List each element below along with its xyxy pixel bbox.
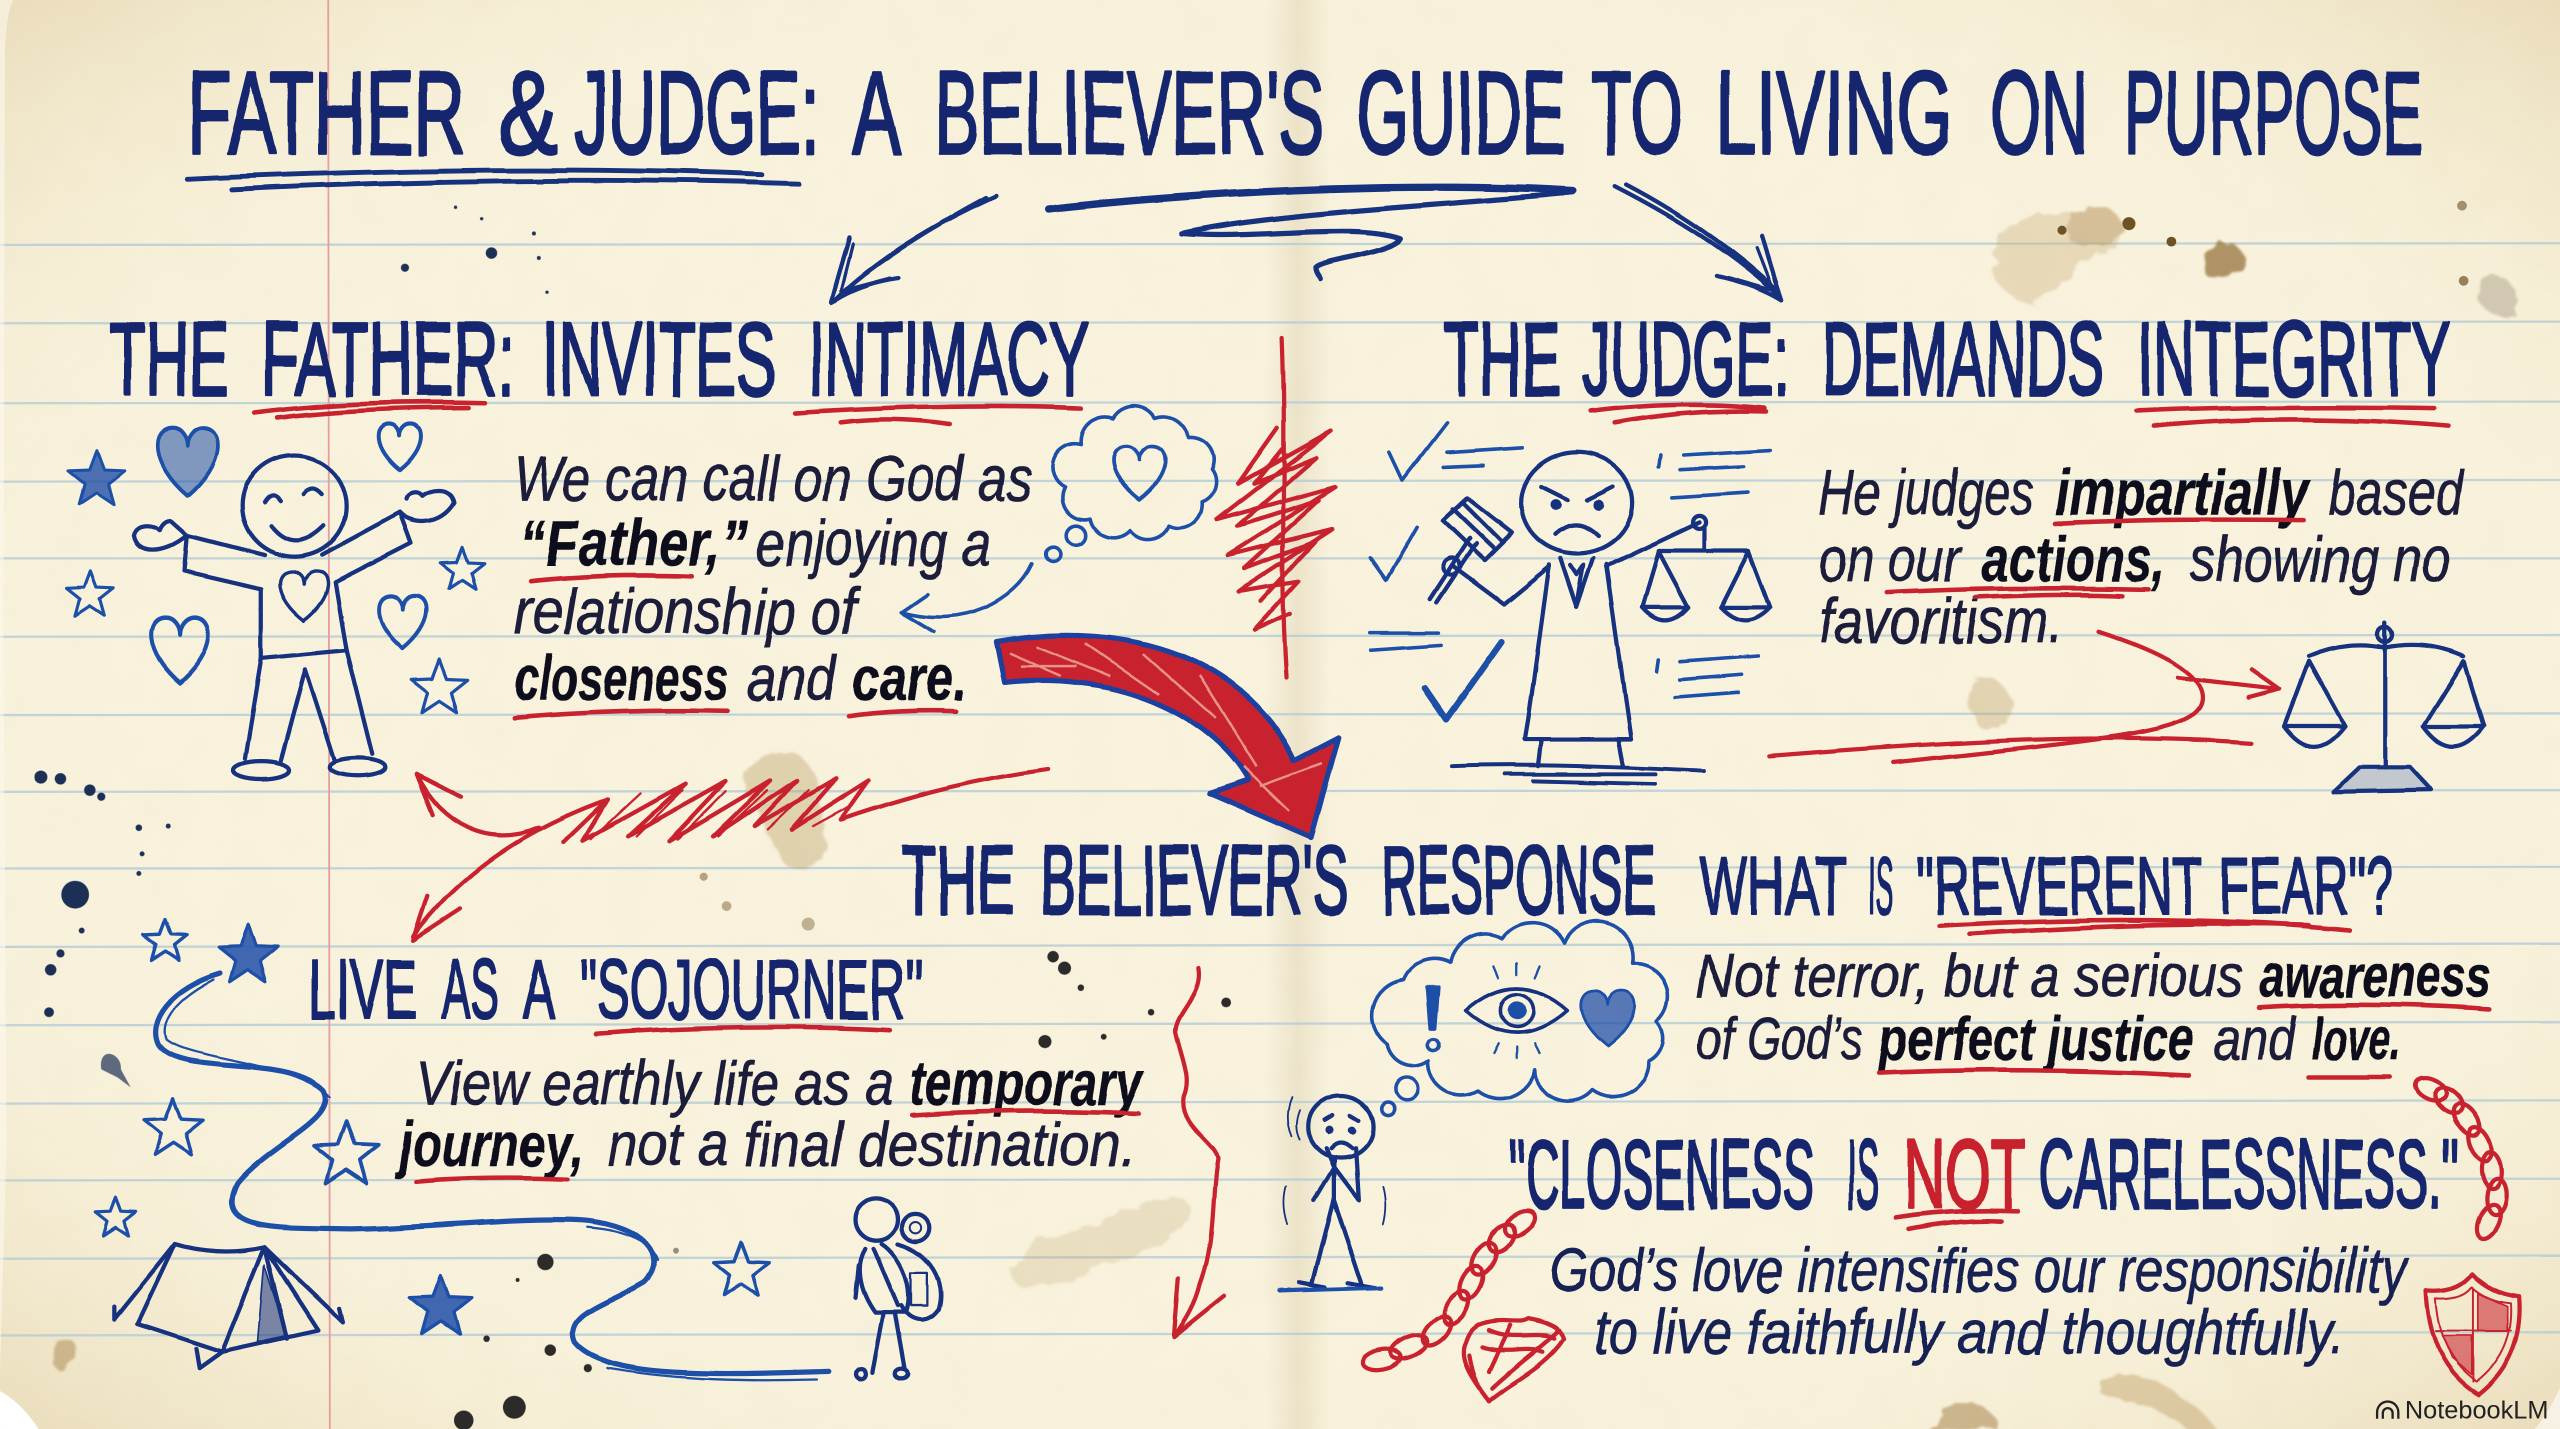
icon: broken link scribble [1464,1319,1564,1401]
heading underline [1940,920,2349,934]
heading: the judge demands integrity: JUDGE: [1582,301,1789,418]
panel: live as a sojourner [96,919,1146,1380]
judge body text: showing no [2189,524,2451,595]
heading underlines [1590,405,2449,426]
title: TO [1590,47,1683,178]
heading underline [596,1027,890,1034]
title: FATHER [188,47,465,178]
judge body text: impartially [2055,457,2311,528]
closeness body text: to live faithfully and thoughtfully. [1593,1298,2344,1367]
body underlines [514,575,955,718]
father body text: closeness [514,643,728,714]
icon: thought cloud with eye [1372,922,1668,1115]
father body text: “Father,” [519,508,748,579]
icon: worried stick figure [1280,1095,1385,1291]
reverent fear body text: love. [2312,1005,2402,1073]
heading: the believer's response: RESPONSE [1381,825,1655,935]
heading: live as a sojourner: A [522,942,555,1037]
icon: balance scale [2284,624,2483,792]
reverent fear body text: awareness [2260,942,2491,1010]
body underlines [1879,1004,2490,1078]
title: A [852,47,902,178]
icon: right red chain [2412,1073,2508,1242]
heading: live as a sojourner: AS [441,942,498,1037]
quote: closeness is not carelessness: "CLOSENESS [1509,1119,1814,1229]
sojourner body text [395,1049,1146,1180]
heading: what is reverent fear: "REVERENT [1917,841,2202,932]
heading: the father invites intimacy: THE [109,301,229,418]
heading: what is reverent fear: WHAT [1700,841,1847,932]
vertical red scribble divider [1216,338,1336,678]
judge body text: favoritism. [1819,586,2064,657]
panel: the believer's response [901,825,2520,1401]
heading: the believer's response: BELIEVER'S [1040,825,1349,935]
title underline [188,170,800,189]
panel: the judge [1370,301,2483,792]
icons: hearts and stars [67,424,484,713]
quote: closeness is not carelessness [1509,1119,2459,1229]
heading underlines [255,403,1081,424]
arrow: title to father [831,196,996,302]
icon: backpacker figure [856,1198,941,1378]
father body text [514,443,1032,714]
sojourner body text: View earthly life as a [416,1049,893,1118]
icon: thought cloud with heart [901,406,1216,632]
heading: live as a sojourner [309,942,922,1037]
heading: what is reverent fear [1700,841,2393,932]
father body text: We can call on God as [514,443,1032,514]
icon: stern judge with gavel and scales [1430,452,1770,784]
title: BELIEVER'S [934,47,1324,178]
heading: the father invites intimacy [109,301,1089,418]
body underlines [1887,520,2304,598]
sojourner body text: temporary [909,1049,1146,1118]
arrow: red swoosh to scales [1770,632,2279,762]
judge body text [1819,457,2466,657]
icons: sojourner stars [96,919,769,1334]
title: & [498,47,558,178]
judge body text: He judges [1819,457,2034,528]
flourish between arrows [1048,187,1574,279]
closeness body text [1549,1236,2410,1367]
panel: the father [67,301,1216,780]
title: GUIDE [1357,47,1566,178]
icon: tent [114,1244,343,1368]
father body text: relationship of [514,576,863,647]
reverent fear body text: and [2214,1005,2297,1073]
sojourner body text: journey, [395,1111,583,1180]
NotebookLM watermark: NotebookLM [2405,1397,2549,1425]
judge body text: based [2328,457,2466,528]
judge body text: actions, [1982,524,2165,595]
sojourner body text: not a final destination. [607,1111,1135,1180]
quote: closeness is not carelessness: IS [1847,1119,1879,1229]
title: ON [1990,47,2088,178]
quote underline [1895,1211,2018,1229]
heading: the father invites intimacy: FATHER: [261,301,514,418]
icon: left red chain [1360,1205,1539,1373]
heading: live as a sojourner: "SOJOURNER" [580,942,922,1037]
title: JUDGE: [575,47,820,178]
heading: the judge demands integrity: THE [1443,301,1561,418]
arrow: big red curved arrow [996,635,1339,838]
arrow: title to judge [1615,184,1781,300]
father body text: enjoying a [756,508,991,579]
icons: checkmarks and dashes [1370,423,1770,720]
heading: the judge demands integrity: DEMANDS [1822,301,2104,418]
heading: what is reverent fear: FEAR"? [2219,841,2393,932]
heading: what is reverent fear: IS [1868,841,1894,932]
reverent fear body text: perfect justice [1878,1005,2194,1073]
title: LIVING [1716,47,1953,178]
title [188,47,2423,178]
icon: smiling father figure [134,455,454,780]
winding journey path [156,973,828,1380]
icon: red shield [2426,1273,2520,1394]
heading: the believer's response: THE [901,825,1016,935]
arrow: red wavy downward arrow [1174,968,1224,1337]
reverent fear body text: Not terror, but a serious [1696,942,2243,1010]
reverent fear body text: of God’s [1696,1005,1863,1073]
heading: the father invites intimacy: INTIMACY [808,301,1089,418]
reverent fear body text [1696,942,2491,1073]
heading: the judge demands integrity [1443,301,2451,418]
arrow: red zigzag forked arrows [413,769,1048,940]
father body text: care. [852,643,967,714]
heading: live as a sojourner: LIVE [309,942,416,1037]
judge body text: on our [1819,524,1963,595]
heading: the father invites intimacy: INVITES [542,301,776,418]
body underlines [416,1111,1138,1181]
father body text: and [746,643,838,714]
quote: closeness is not carelessness: NOT [1904,1119,2026,1229]
